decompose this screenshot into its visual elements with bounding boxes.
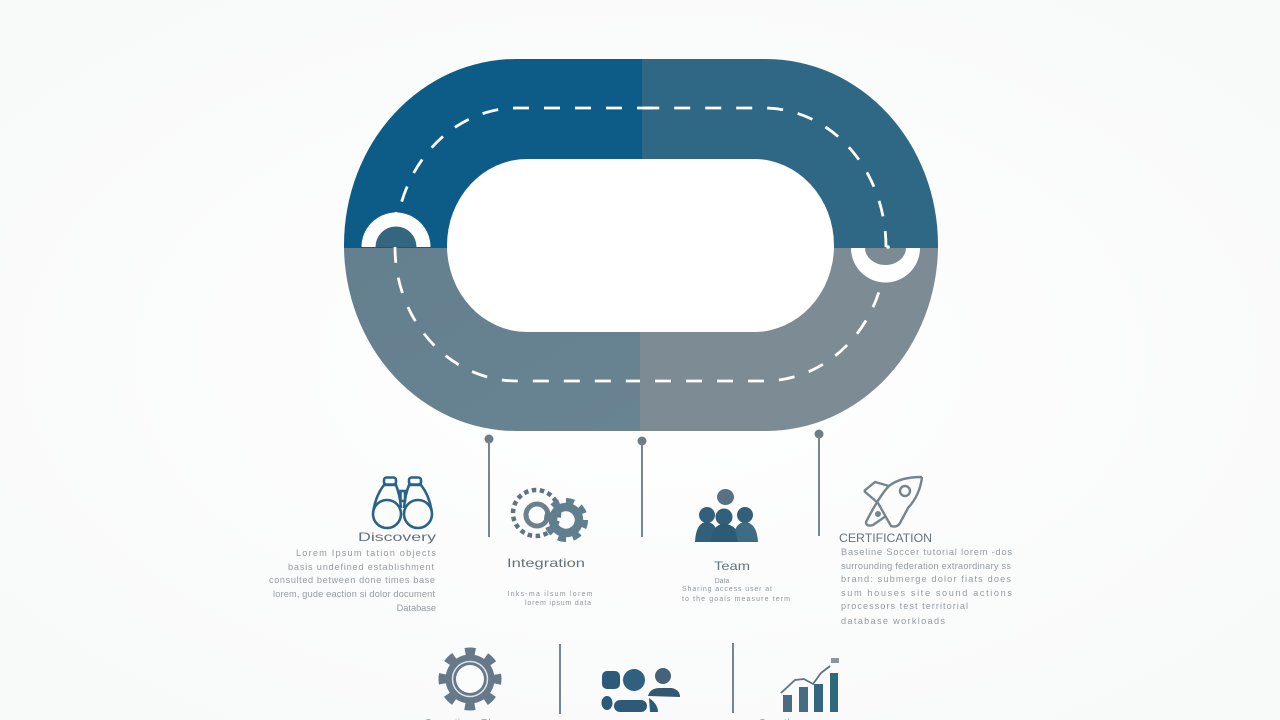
icon: group (602, 668, 680, 712)
end marker (851, 245, 920, 282)
text block: team (682, 578, 790, 603)
dashed route: left half (395, 108, 653, 381)
divider: bottom left (559, 644, 561, 714)
dashed route: right half (642, 108, 886, 381)
text block: team: Sharing access user at (682, 586, 772, 593)
connector: centre (638, 436, 646, 537)
heading: discovery: Discovery (358, 530, 436, 544)
segment: top left (344, 59, 642, 248)
loop diagram (344, 59, 938, 431)
text block: discovery (269, 548, 436, 613)
text block: discovery: lorem, gude eaction si dolor document (273, 589, 435, 599)
text block: discovery: consulted between done times base (269, 575, 435, 585)
text block: certification: database workloads (841, 616, 945, 626)
icon: binoculars (373, 478, 432, 528)
connector: left (484, 434, 494, 537)
text block: certification: Baseline Soccer tutorial lorem -dos (841, 547, 1012, 557)
segment: top right (642, 59, 938, 248)
heading: team: Team (714, 559, 750, 573)
text block: certification: processors test territorial (841, 601, 968, 611)
text block: discovery: basis undefined establishment (288, 562, 434, 572)
text block: certification: surrounding federation extraordinary ss (841, 561, 1011, 571)
heading: integration: Integration (507, 556, 585, 570)
heading: certification: CERTIFICATION (839, 531, 932, 545)
segment: bottom left (344, 248, 640, 431)
text block: discovery: Lorem Ipsum tation objects (296, 548, 436, 558)
segment: bottom right (640, 248, 938, 431)
inner opening (447, 159, 834, 332)
text block: discovery: Database (397, 603, 436, 613)
icon: team (695, 489, 758, 542)
text block: integration: Inks-ma ilsum lorem (508, 591, 593, 598)
text block: certification: brand: submerge dolor fiats does (841, 574, 1011, 584)
icon: gears (513, 490, 585, 539)
start marker (362, 212, 430, 247)
text block: integration: lorem ipsum data (525, 600, 591, 607)
cropped bottom labels (424, 718, 793, 720)
text block: certification: sum houses site sound actions (841, 588, 1012, 598)
divider: bottom right (732, 643, 734, 713)
connector: right (814, 430, 824, 536)
icon: growth chart (781, 658, 839, 712)
text block: certification (841, 547, 1012, 626)
icon: rocket (864, 477, 922, 527)
text block: team: Data (715, 578, 729, 585)
text block: team: to the goals measure term (682, 596, 790, 603)
icon: settings gear (442, 652, 498, 706)
text block: integration (508, 591, 593, 607)
